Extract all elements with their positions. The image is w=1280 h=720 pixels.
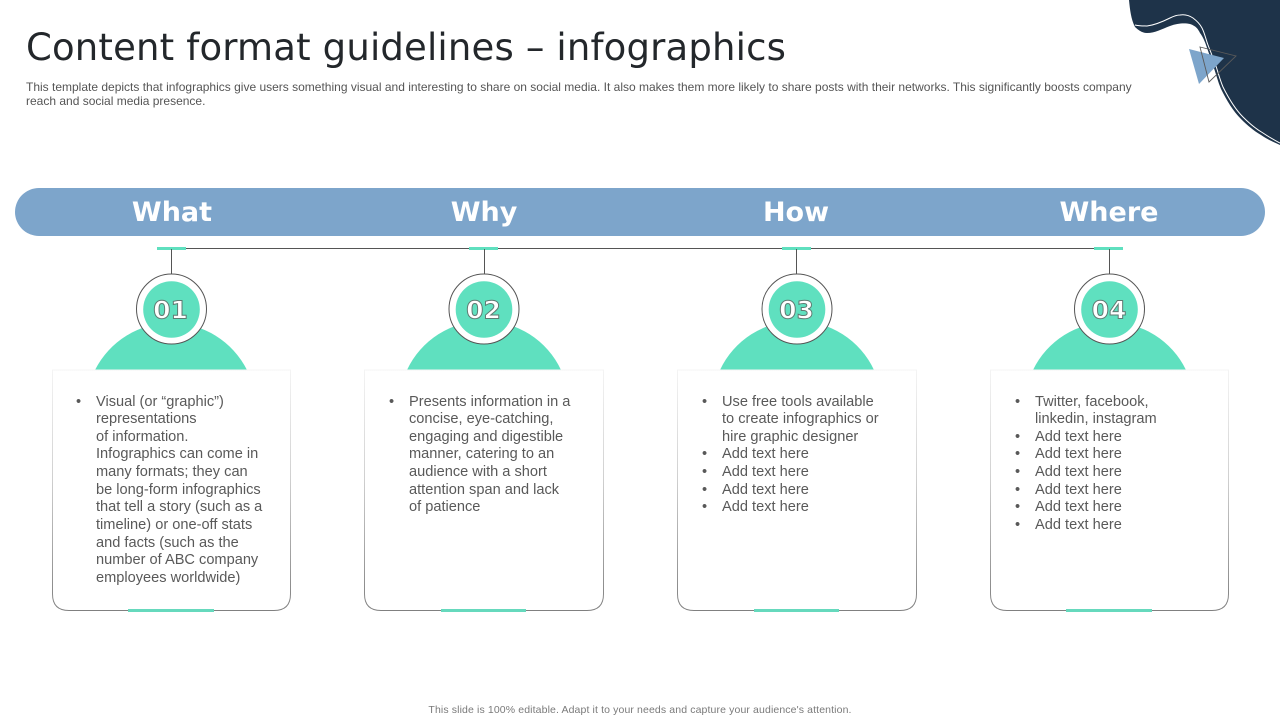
text block: where: Add text here [1035,499,1122,515]
text block: what [76,394,262,586]
text block: why: audience with a short [409,464,547,480]
heading: Why: Why [451,197,517,228]
column 3 graphics [678,247,916,612]
title: Content format guidelines – infographics [26,26,786,69]
text block: what: representations [96,411,197,427]
text block: what: of information. [96,429,188,445]
decorative corner shape [1129,0,1280,145]
column 1 graphics: 01 [153,296,188,324]
description text: reach and social media presence. [26,94,205,108]
heading: How: How [763,197,829,228]
text block: how: Add text here [722,446,809,462]
text block: why [390,394,570,515]
text block: where: Add text here [1035,446,1122,462]
text block: how: to create infographics or [722,411,879,427]
text block: what: number of ABC company [96,552,258,568]
column 2 graphics [364,247,604,612]
text block: where: Add text here [1035,429,1122,445]
text block: where [1016,394,1157,533]
column 1 graphics [52,247,290,612]
text block: what: many formats; they can [96,464,248,480]
text block: why: of patience [409,499,480,515]
text block: what: employees worldwide) [96,570,240,586]
text block: why: concise, eye-catching, [409,411,553,427]
text block: how: Use free tools available [722,394,874,410]
text block: how: Add text here [722,482,809,498]
text block: where: Add text here [1035,482,1122,498]
text block: what: and facts (such as the [96,535,239,551]
description text: This template depicts that infographics give users something visual and interesting to share on social media. It also makes them more likely to share posts with their networks. This significantly boosts company [26,80,1132,94]
heading: Where: Where [1060,197,1158,228]
text block: how [702,394,879,515]
text block: what: be long-form infographics [96,482,261,498]
text block: why: attention span and lack [409,482,559,498]
column 4 graphics: 04 [1092,296,1126,324]
column 4 graphics [990,247,1228,612]
text block: where: Twitter, facebook, [1035,394,1149,410]
text block: where: Add text here [1035,464,1122,480]
text block: what: Infographics can come in [96,446,258,462]
text block: why: Presents information in a [409,394,570,410]
text block: where: linkedin, instagram [1035,411,1157,427]
text block: why: manner, catering to an [409,446,554,462]
text block: what: that tell a story (such as a [96,499,262,515]
footer note: This slide is 100% editable. Adapt it to your needs and capture your audience's attention. [428,704,852,716]
text block: how: hire graphic designer [722,429,858,445]
text block: why: engaging and digestible [409,429,563,445]
text block: what: Visual (or “graphic”) [96,394,224,410]
description text [26,80,1132,108]
column 3 graphics: 03 [779,296,814,324]
text block: what: timeline) or one-off stats [96,517,252,533]
text block: how: Add text here [722,464,809,480]
heading: What: What [132,197,212,228]
header band [15,188,1265,236]
text block: how: Add text here [722,499,809,515]
column 2 graphics: 02 [466,296,501,324]
text block: where: Add text here [1035,517,1122,533]
